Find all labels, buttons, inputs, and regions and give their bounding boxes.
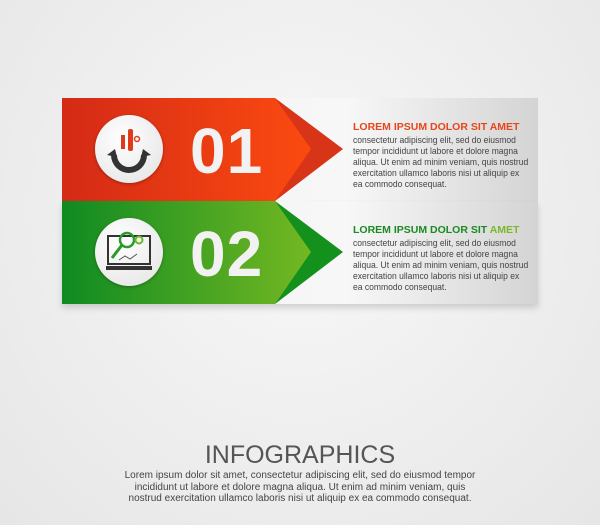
arrow shape green — [62, 201, 343, 304]
text block 01: aliqua. Ut enim ad minim veniam, quis nostrud — [353, 157, 528, 167]
text block 02 — [353, 224, 528, 292]
panel: step 02 — [62, 201, 538, 304]
footer text: incididunt ut labore et dolore magna aliqua. Ut enim ad minim veniam, quis — [135, 482, 465, 492]
number 01: 01 — [190, 115, 263, 187]
number 02: 02 — [190, 218, 263, 290]
text block 01: ea commodo consequat. — [353, 179, 447, 189]
arrow shape red — [62, 98, 343, 201]
text block 02: ea commodo consequat. — [353, 282, 447, 292]
text block 01: LOREM IPSUM DOLOR SIT AMET — [353, 121, 519, 133]
icon: monitor magnifier — [95, 218, 163, 286]
text block 02: exercitation ullamco laboris nisi ut aliquip ex — [353, 271, 519, 281]
text block 02: LOREM IPSUM DOLOR SIT AMET — [353, 224, 519, 236]
text block 02: tempor incididunt ut labore et dolore magna — [353, 249, 518, 259]
text block 01: exercitation ullamco laboris nisi ut aliquip ex — [353, 168, 519, 178]
panel: step 01 — [62, 98, 538, 201]
icon: tools gear — [95, 115, 163, 183]
text block 02: consectetur adipiscing elit, sed do eiusmod — [353, 238, 516, 248]
footer text — [125, 470, 476, 504]
footer text: Lorem ipsum dolor sit amet, consectetur adipiscing elit, sed do eiusmod tempor — [125, 470, 475, 481]
footer text: nostrud exercitation ullamco laboris nisi ut aliquip ex ea commodo consequat. — [129, 493, 471, 504]
text block 01: tempor incididunt ut labore et dolore magna — [353, 146, 518, 156]
title: INFOGRAPHICS — [205, 441, 395, 469]
text block 02: aliqua. Ut enim ad minim veniam, quis nostrud — [353, 260, 528, 270]
text block 01: consectetur adipiscing elit, sed do eiusmod — [353, 135, 516, 145]
text block 01 — [353, 121, 528, 189]
